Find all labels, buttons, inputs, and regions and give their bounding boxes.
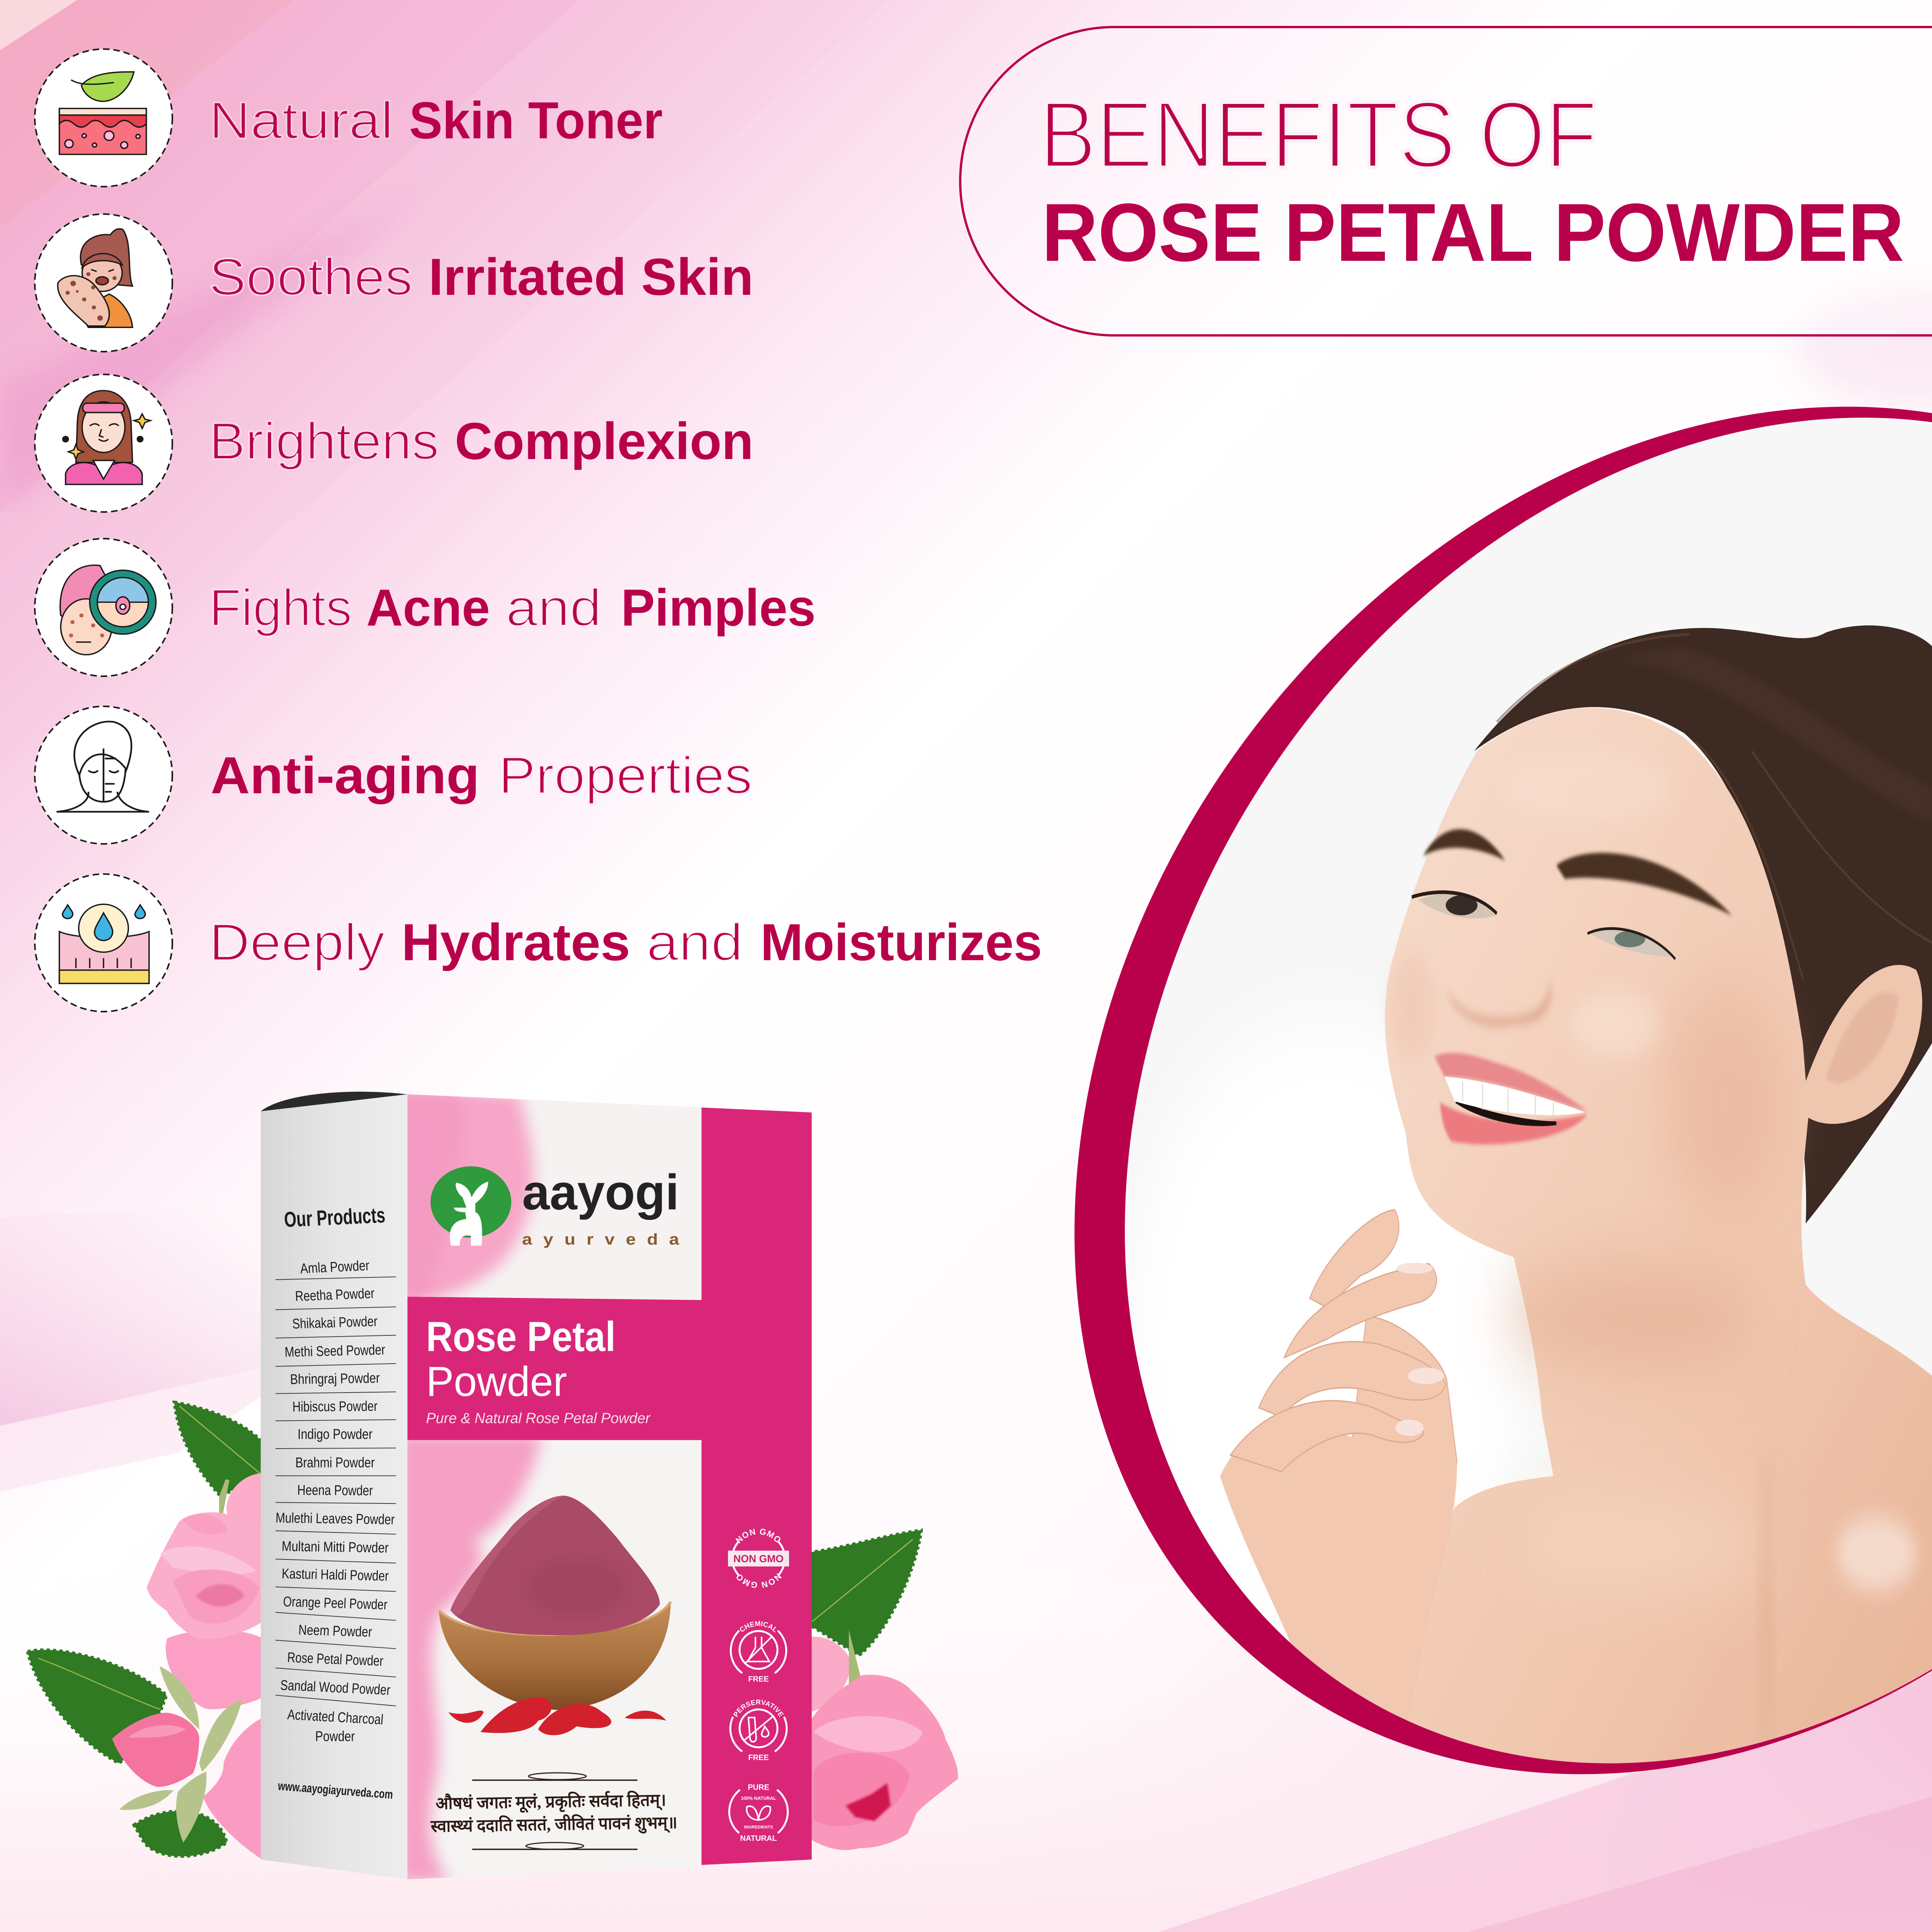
badge: pure natural: 100% NATURAL [741, 1796, 776, 1801]
label: Anti-aging Properties [211, 746, 752, 804]
badge: non gmo: NON GMO [733, 1553, 784, 1565]
product list: Rose Petal Powder [287, 1650, 384, 1669]
benefit list [35, 49, 1042, 1012]
product list: Hibiscus Powder [293, 1398, 378, 1415]
badge: pure natural: PURE [748, 1783, 769, 1792]
icon: face with magnified pimple [35, 539, 172, 676]
heading line: Benefits of: BENEFITS OF [1039, 82, 1597, 187]
heading line: Rose Petal Powder: ROSE PETAL POWDER [1042, 187, 1904, 279]
benefit: fights acne and pimples [35, 539, 816, 676]
sepals [119, 1666, 242, 1842]
product list: Methi Seed Powder [284, 1342, 385, 1360]
product list: Indigo Powder [298, 1427, 372, 1442]
roses and leaves, left [27, 1402, 263, 1859]
label: Fights Acne and Pimples [209, 578, 816, 637]
label: Fights Acne and Pimples: Fights [209, 578, 352, 637]
eyebrows [1423, 829, 1505, 861]
scattered red petals [449, 1697, 666, 1735]
main left rose [147, 1512, 263, 1639]
badge: chemical free: FREE [748, 1675, 769, 1684]
label: Deeply Hydrates and Moisturizes [209, 913, 1042, 971]
badge: chemical free: CHEMICAL [738, 1620, 779, 1634]
upper bud [226, 1473, 263, 1549]
sanskrit verse: औषधं जगतः मूलं, प्रकृतिः सर्वदा हितम्। [435, 1790, 667, 1814]
badge: pure natural: INGREDIENTS [744, 1825, 773, 1830]
skin shading [1497, 1266, 1757, 1367]
product list: Shikakai Powder [292, 1314, 378, 1332]
ear [1797, 965, 1922, 1124]
label: Natural Skin Toner: Natural [209, 91, 393, 150]
product list: Reetha Powder [295, 1286, 375, 1304]
product list: Bhringraj Powder [290, 1371, 380, 1387]
product list: Activated Charcoal [287, 1707, 384, 1728]
benefit: anti-aging properties [35, 706, 752, 844]
label: Deeply Hydrates and Moisturizes: Moisturizes [760, 913, 1042, 971]
header pill: benefits title [960, 27, 1932, 335]
label: Natural Skin Toner [209, 91, 663, 150]
benefit: natural skin toner [35, 49, 663, 187]
roses and leaves, right [808, 1530, 958, 1850]
label: Fights Acne and Pimples: Acne [366, 578, 490, 637]
eyes [1412, 892, 1675, 959]
crimson oval frame [811, 155, 1932, 1932]
product list: Sandal Wood Powder [280, 1677, 391, 1698]
product box with roses [27, 1088, 958, 1882]
logo mark [430, 1166, 511, 1238]
badge: non gmo [728, 1527, 789, 1590]
badge: preservative free: PERSERVATIVE [732, 1698, 785, 1718]
product name band: Rose Petal [426, 1313, 616, 1360]
hair [1474, 625, 1932, 1223]
label: Anti-aging Properties: Properties [498, 746, 752, 804]
nose [1447, 979, 1552, 1027]
product list: Amla Powder [300, 1258, 370, 1277]
icon: leaf over skin layers [35, 49, 172, 187]
label: Soothes Irritated Skin [209, 248, 753, 306]
label: Brightens Complexion: Brightens [209, 412, 439, 470]
rose bud [112, 1713, 199, 1787]
badge: preservative free [730, 1698, 787, 1762]
label: Soothes Irritated Skin: Soothes [209, 248, 413, 306]
logo wordmark: aayogi [522, 1165, 679, 1220]
label: Fights Acne and Pimples: Pimples [621, 578, 816, 637]
lower pink rose body [166, 1630, 263, 1709]
top white panel with logo: ayurveda [522, 1230, 679, 1248]
product list: Multani Mitti Powder [282, 1539, 389, 1556]
box front panel [397, 1088, 812, 1882]
face, neck and shoulders [1383, 708, 1932, 1809]
product list [276, 1258, 396, 1744]
product list: Powder [315, 1729, 355, 1744]
product list: Mulethi Leaves Powder [276, 1510, 395, 1527]
sanskrit verse: स्वास्थ्यं ददाति सततं, जीवितं पावनं शुभम्॥ [430, 1813, 678, 1837]
badge: non gmo: NON GMO [734, 1527, 783, 1545]
label: Anti-aging Properties: Anti-aging [211, 746, 480, 804]
side panel heading: Our Products: Our Products [283, 1203, 386, 1232]
box side panel [261, 1092, 407, 1879]
badge: pure natural [729, 1783, 788, 1843]
icon: girl with irritated skin [35, 214, 172, 352]
fingernails [1395, 1263, 1444, 1436]
badge: non gmo: NON GMO [734, 1571, 783, 1590]
label: Fights Acne and Pimples: and [506, 578, 602, 637]
icon: water drop over skin [35, 874, 172, 1012]
lips and teeth [1434, 1053, 1587, 1145]
benefit: brightens complexion [35, 374, 753, 512]
product name band: Powder [426, 1358, 567, 1405]
badge: pure natural: NATURAL [740, 1834, 777, 1843]
top white panel with logo [397, 1088, 702, 1304]
website: www.aayogiayurveda.com [277, 1779, 394, 1802]
lower right rose [203, 1718, 263, 1859]
rose powder mound [451, 1496, 660, 1635]
label: Brightens Complexion [209, 412, 753, 470]
photo background and woman [1125, 417, 1932, 1764]
label: Brightens Complexion: Complexion [455, 412, 753, 470]
bowl [439, 1602, 671, 1710]
label: Soothes Irritated Skin: Irritated Skin [429, 248, 753, 306]
icon: half-aged face line art [35, 706, 172, 844]
product list: Neem Powder [298, 1622, 372, 1640]
product list: Kasturi Haldi Powder [281, 1566, 389, 1584]
portrait: crimson ring with smiling woman [811, 155, 1932, 1932]
label: Deeply Hydrates and Moisturizes: and [646, 913, 743, 971]
benefit: deeply hydrates and moisturizes [35, 874, 1042, 1012]
badge: preservative free: FREE [748, 1753, 769, 1762]
sanskrit verse [430, 1773, 678, 1849]
label: Deeply Hydrates and Moisturizes: Deeply [209, 913, 385, 971]
icon: girl with glowing face [35, 374, 172, 512]
lower white panel with bowl of powder [397, 1434, 702, 1882]
benefit: soothes irritated skin [35, 214, 753, 352]
product list: Brahmi Powder [295, 1455, 375, 1471]
hand and fingers [1220, 1210, 1457, 1736]
label: Natural Skin Toner: Skin Toner [409, 91, 663, 150]
label: Deeply Hydrates and Moisturizes: Hydrates [401, 913, 630, 971]
product name band [426, 1313, 651, 1426]
badge: chemical free [731, 1620, 786, 1684]
product name band: Pure & Natural Rose Petal Powder [426, 1410, 651, 1426]
product list: Orange Peel Powder [283, 1594, 388, 1613]
product list: Heena Powder [297, 1483, 373, 1498]
